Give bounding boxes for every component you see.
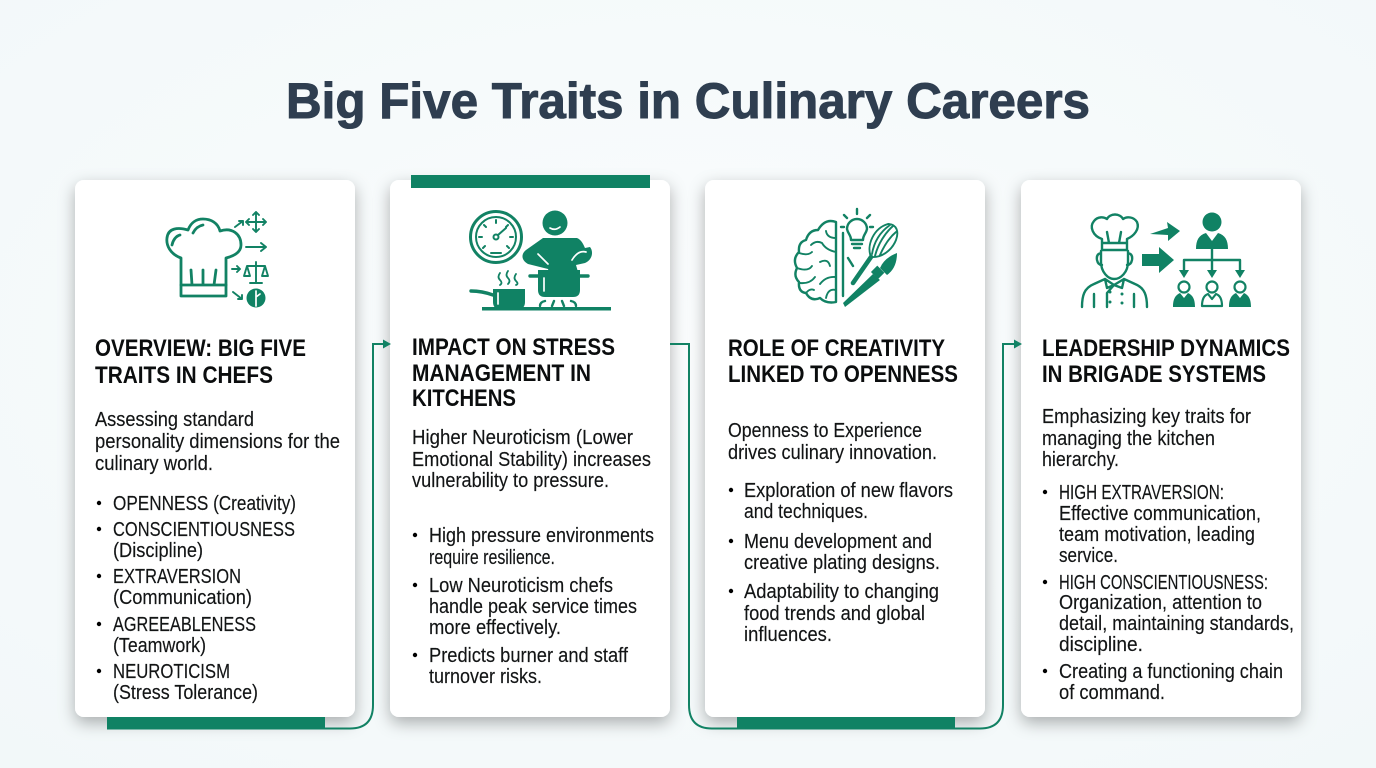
text: leadership intro: Emphasizing key traits for (1042, 406, 1251, 428)
list: five traits: OPENNESS (Creativity) (113, 493, 296, 515)
list: creativity points: Menu development and (744, 531, 932, 553)
list: creativity points: Exploration of new flavors (744, 480, 953, 502)
text: overview intro (95, 409, 340, 475)
list: five traits: EXTRAVERSION (113, 566, 241, 588)
text: stress intro: Higher Neuroticism (Lower (412, 427, 633, 449)
list: leadership points: detail, maintaining standards, (1059, 613, 1294, 635)
list: leadership points: Effective communication, (1059, 503, 1261, 525)
heading: creativity (728, 335, 958, 388)
list: leadership points: HIGH CONSCIENTIOUSNESS: (1059, 572, 1268, 594)
heading: leadership (1042, 335, 1290, 388)
heading: leadership: IN BRIGADE SYSTEMS (1042, 361, 1266, 388)
list: five traits: (Stress Tolerance) (113, 682, 258, 704)
text: creativity intro (728, 420, 937, 464)
heading: stress: KITCHENS (412, 385, 516, 412)
text: overview intro: culinary world. (95, 453, 213, 475)
list: five traits: (Discipline) (113, 540, 203, 562)
heading: stress: IMPACT ON STRESS (412, 334, 615, 361)
heading: overview (95, 335, 306, 389)
list: leadership points: Organization, attention to (1059, 592, 1262, 614)
list: leadership points: of command. (1059, 682, 1165, 704)
panel: creativity (705, 180, 985, 730)
panel: stress management (390, 175, 670, 717)
text: stress intro (412, 427, 651, 492)
icon: chef and brigade hierarchy (1082, 212, 1251, 307)
text: creativity intro: Openness to Experience (728, 420, 922, 442)
list: five traits: NEUROTICISM (113, 661, 230, 683)
list: five traits (97, 493, 296, 704)
list: stress points: more effectively. (429, 617, 561, 639)
text: overview intro: Assessing standard (95, 409, 254, 431)
text: leadership intro: managing the kitchen (1042, 428, 1215, 450)
heading: stress (412, 334, 615, 412)
list: stress points (413, 525, 654, 688)
list: leadership points: HIGH EXTRAVERSION: (1059, 482, 1224, 504)
list: creativity points: influences. (744, 624, 832, 646)
list: five traits: CONSCIENTIOUSNESS (113, 519, 295, 541)
heading: overview: OVERVIEW: BIG FIVE (95, 335, 306, 362)
heading: creativity: LINKED TO OPENNESS (728, 361, 958, 388)
panel: leadership (1021, 180, 1301, 717)
list: creativity points: Adaptability to changing (744, 581, 939, 603)
arrow: stress to creativity connector (670, 344, 745, 728)
icon: brain, bulb, whisk and brush (795, 209, 897, 307)
list: five traits: AGREEABLENESS (113, 614, 256, 636)
list: stress points: turnover risks. (429, 666, 542, 688)
text: leadership intro: hierarchy. (1042, 449, 1119, 471)
heading: creativity: ROLE OF CREATIVITY (728, 335, 945, 362)
panel: overview (75, 180, 355, 730)
list: stress points: Predicts burner and staff (429, 645, 628, 667)
list: creativity points: and techniques. (744, 501, 868, 523)
heading: stress: MANAGEMENT IN (412, 360, 591, 387)
icon: chef hat with trait symbols (167, 212, 268, 308)
list: leadership points (1043, 482, 1294, 704)
list: five traits: (Communication) (113, 587, 252, 609)
list: stress points: Low Neuroticism chefs (429, 575, 613, 597)
text: creativity intro: drives culinary innovation. (728, 442, 937, 464)
arrow: overview to stress connector (320, 340, 391, 728)
accent bar: creativity bottom (737, 717, 955, 730)
title: Big Five Traits in Culinary Careers (286, 73, 1090, 129)
list: leadership points: team motivation, leading (1059, 524, 1255, 546)
text: stress intro: Emotional Stability) increases (412, 449, 651, 471)
list: leadership points: service. (1059, 545, 1118, 567)
heading: overview: TRAITS IN CHEFS (95, 362, 273, 389)
icon: gauge and cook at stove (470, 210, 611, 310)
heading: leadership: LEADERSHIP DYNAMICS (1042, 335, 1290, 362)
list: creativity points (729, 480, 953, 646)
accent bar: stress top (411, 175, 650, 188)
text: leadership intro (1042, 406, 1251, 471)
list: stress points: require resilience. (429, 547, 555, 569)
list: leadership points: Creating a functioning chain (1059, 661, 1283, 683)
text: overview intro: personality dimensions for the (95, 431, 340, 453)
list: creativity points: creative plating designs. (744, 552, 940, 574)
list: stress points: High pressure environments (429, 525, 654, 547)
text: stress intro: vulnerability to pressure. (412, 470, 609, 492)
list: leadership points: discipline. (1059, 634, 1143, 656)
list: stress points: handle peak service times (429, 596, 637, 618)
list: five traits: (Teamwork) (113, 635, 206, 657)
arrow: creativity to leadership connector (950, 340, 1022, 728)
list: creativity points: food trends and global (744, 603, 925, 625)
accent bar: overview bottom (107, 717, 325, 730)
